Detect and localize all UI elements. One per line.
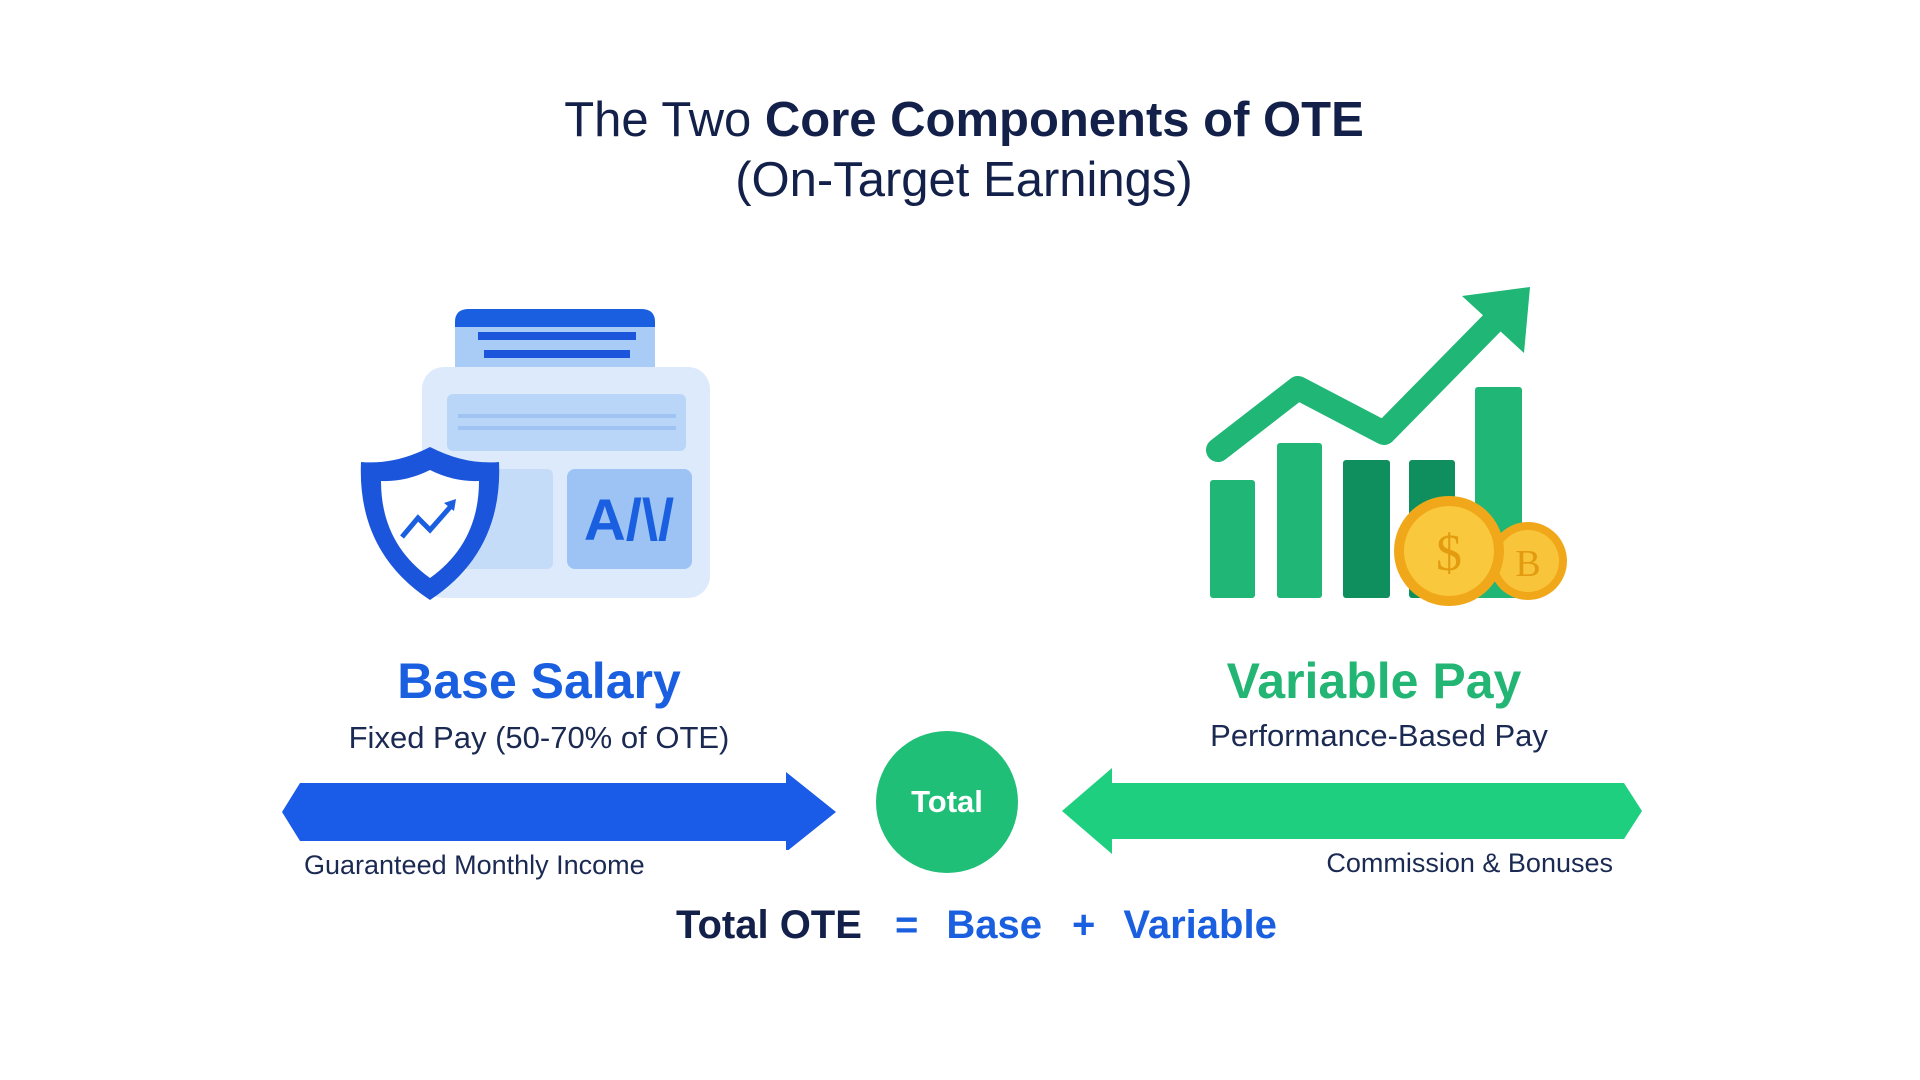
title: (On-Target Earnings) [735,153,1193,207]
label: guaranteed monthly income: Guaranteed Monthly Income [304,850,645,880]
text: performance-based pay: Performance-Based Pay [1210,718,1548,753]
circle: total [876,731,1018,873]
title [564,93,1364,207]
icon: base salary document with shield [360,309,710,600]
heading: base salary: Base Salary [397,653,681,709]
icon: base salary document with shield: A/\/ [584,488,674,553]
icon: variable pay growth chart with coins [1206,287,1567,606]
circle: total: Total [911,784,983,819]
icon: variable pay growth chart with coins: $ [1436,525,1462,582]
text: fixed pay: Fixed Pay (50-70% of OTE) [349,720,729,755]
icon: variable pay growth chart with coins: B [1515,543,1541,585]
heading: variable pay: Variable Pay [1227,653,1521,709]
formula: Total OTE = Base + Variable [676,903,1277,947]
label: commission & bonuses: Commission & Bonuses [1326,848,1613,878]
arrow: green variable [1062,768,1642,854]
arrow: blue base [282,772,836,850]
title: The Two Core Components of OTE [564,93,1364,147]
